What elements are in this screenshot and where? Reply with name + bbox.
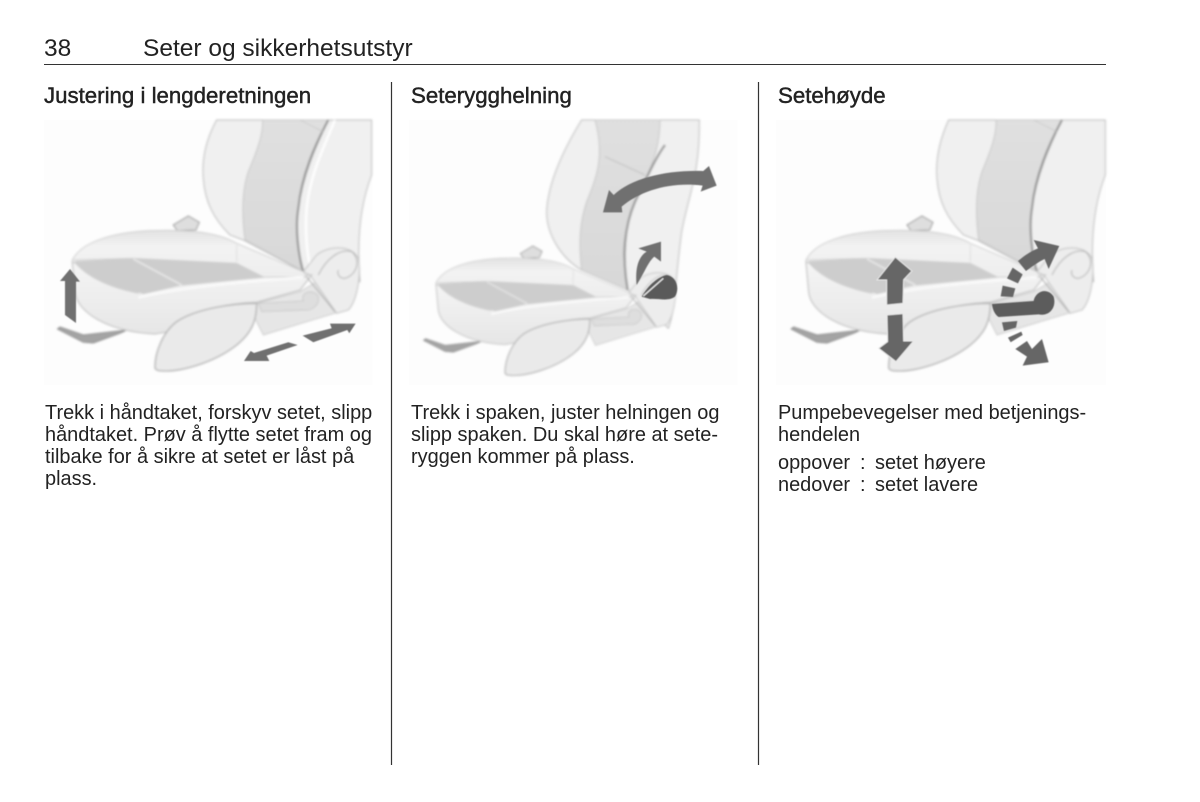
arrow: pull lever up bbox=[636, 242, 661, 285]
illustration: backrest recline bbox=[409, 120, 737, 385]
text: recline instructions bbox=[411, 402, 719, 468]
heading: lengthwise adjustment: Justering i lengderetningen bbox=[44, 83, 311, 108]
text: lengthwise instructions: Trekk i håndtaket, forskyv setet, slipp bbox=[45, 402, 372, 424]
lever knob bbox=[642, 275, 677, 299]
text: lengthwise instructions bbox=[45, 402, 372, 490]
arrow: pump lever down bbox=[1015, 339, 1049, 366]
lever highlight bbox=[643, 278, 663, 296]
text: recline instructions: slipp spaken. Du skal høre at sete- bbox=[411, 424, 718, 446]
text: height instructions bbox=[778, 402, 1086, 446]
arrow: slide backward bbox=[303, 324, 356, 342]
arrow: pull handle up bbox=[60, 269, 80, 323]
column divider right bbox=[758, 82, 760, 765]
header rule bbox=[44, 64, 1106, 66]
text: height instructions: Pumpebevegelser med betjenings- bbox=[778, 402, 1086, 424]
text: lengthwise instructions: plass. bbox=[45, 468, 97, 490]
text: downward label: setet lavere bbox=[875, 474, 978, 496]
column divider left bbox=[390, 82, 392, 765]
illustration: seat height bbox=[776, 120, 1106, 385]
text: downward label: nedover bbox=[778, 474, 850, 496]
arrow: pump lever up bbox=[1018, 240, 1059, 271]
text: upward label: oppover bbox=[778, 452, 850, 474]
arrow: raise seat bbox=[877, 257, 912, 305]
operating lever bbox=[992, 291, 1054, 317]
text: upward label bbox=[778, 452, 986, 474]
text: downward label bbox=[778, 474, 978, 496]
dashes: lower pump path bbox=[1002, 321, 1023, 342]
arrow: lower seat bbox=[879, 314, 914, 362]
heading: seat height: Setehøyde bbox=[778, 83, 886, 108]
text: lengthwise instructions: tilbake for å sikre at setet er låst på bbox=[45, 446, 354, 468]
page title: Seter og sikkerhetsutstyr bbox=[143, 35, 413, 62]
heading: backrest recline: Seterygghelning bbox=[411, 83, 572, 108]
text: recline instructions: ryggen kommer på plass. bbox=[411, 446, 635, 468]
page number: 38 bbox=[44, 35, 71, 62]
arrow: backrest recline curved bbox=[603, 166, 717, 212]
text: upward label: : bbox=[860, 452, 866, 474]
text: upward label: setet høyere bbox=[875, 452, 986, 474]
arrow: slide forward bbox=[244, 342, 298, 361]
illustration: longitudinal seat adjustment bbox=[44, 120, 372, 385]
text: recline instructions: Trekk i spaken, juster helningen og bbox=[411, 402, 719, 424]
dashes: upper pump path bbox=[1001, 268, 1023, 297]
text: height instructions: hendelen bbox=[778, 424, 860, 446]
text: downward label: : bbox=[860, 474, 866, 496]
text: lengthwise instructions: håndtaket. Prøv å flytte setet fram og bbox=[45, 424, 372, 446]
